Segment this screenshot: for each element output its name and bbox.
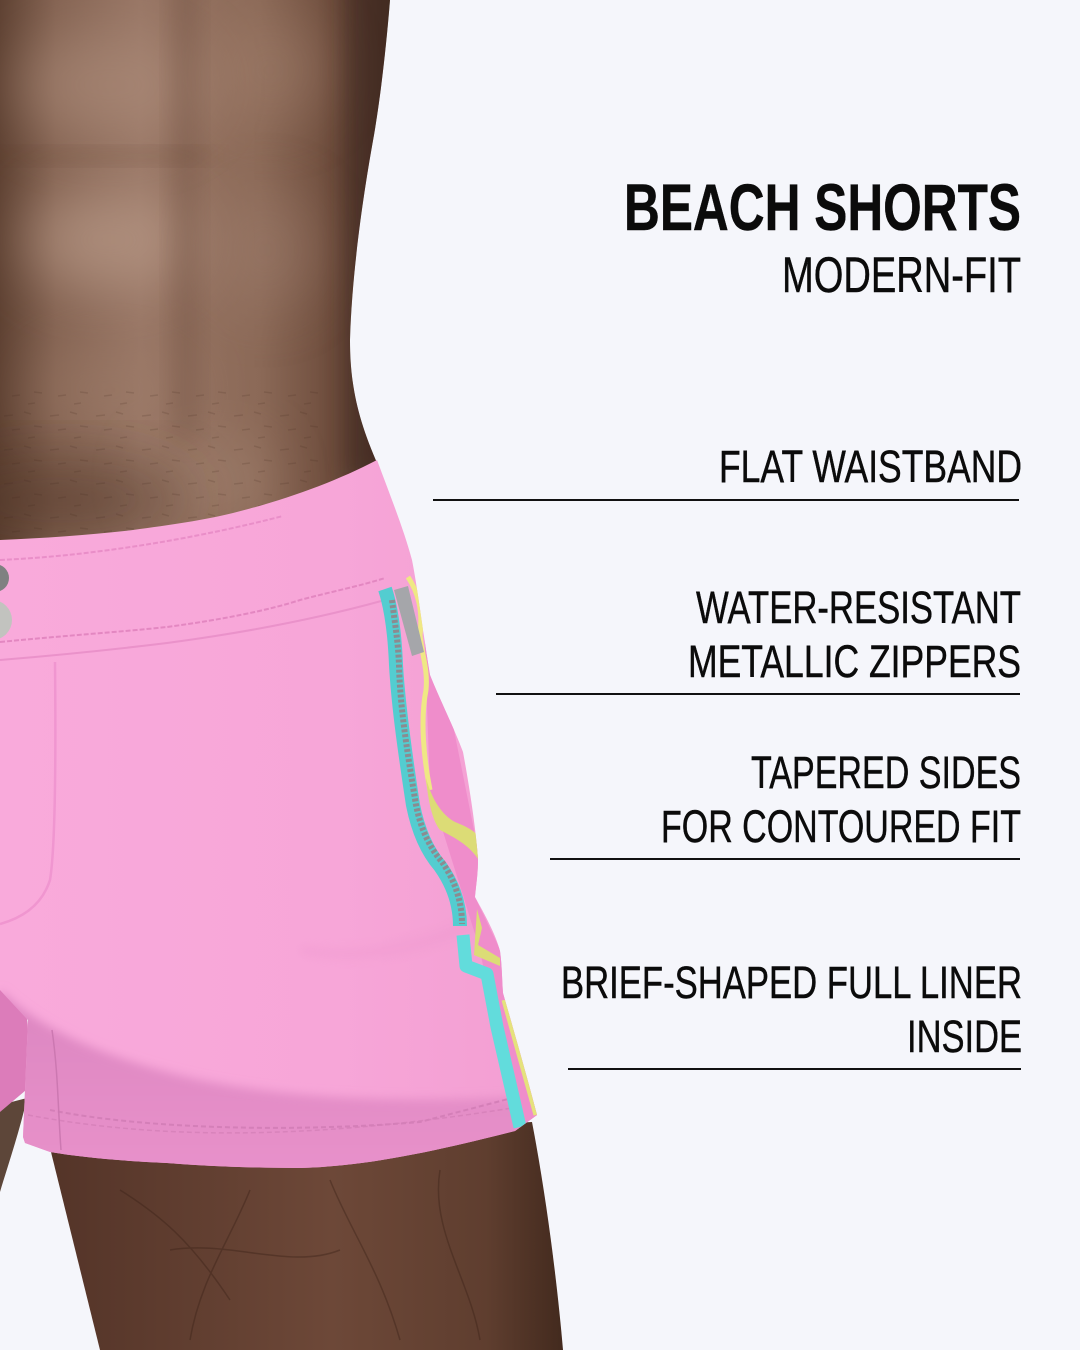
feature: zippers — [496, 582, 1021, 694]
feature: liner: INSIDE — [907, 1011, 1022, 1062]
feature: liner — [561, 957, 1022, 1069]
photo: thighs — [0, 1098, 563, 1350]
photo: back leg of shorts — [0, 988, 32, 1112]
icon: snap buttons — [0, 564, 12, 640]
photo: model torso — [0, 0, 405, 560]
side panel and stripes — [408, 577, 540, 1131]
feature: tapered sides — [550, 747, 1021, 859]
icon: zipper — [385, 586, 462, 926]
photo: pink shorts — [0, 450, 560, 1190]
title — [624, 170, 1021, 303]
